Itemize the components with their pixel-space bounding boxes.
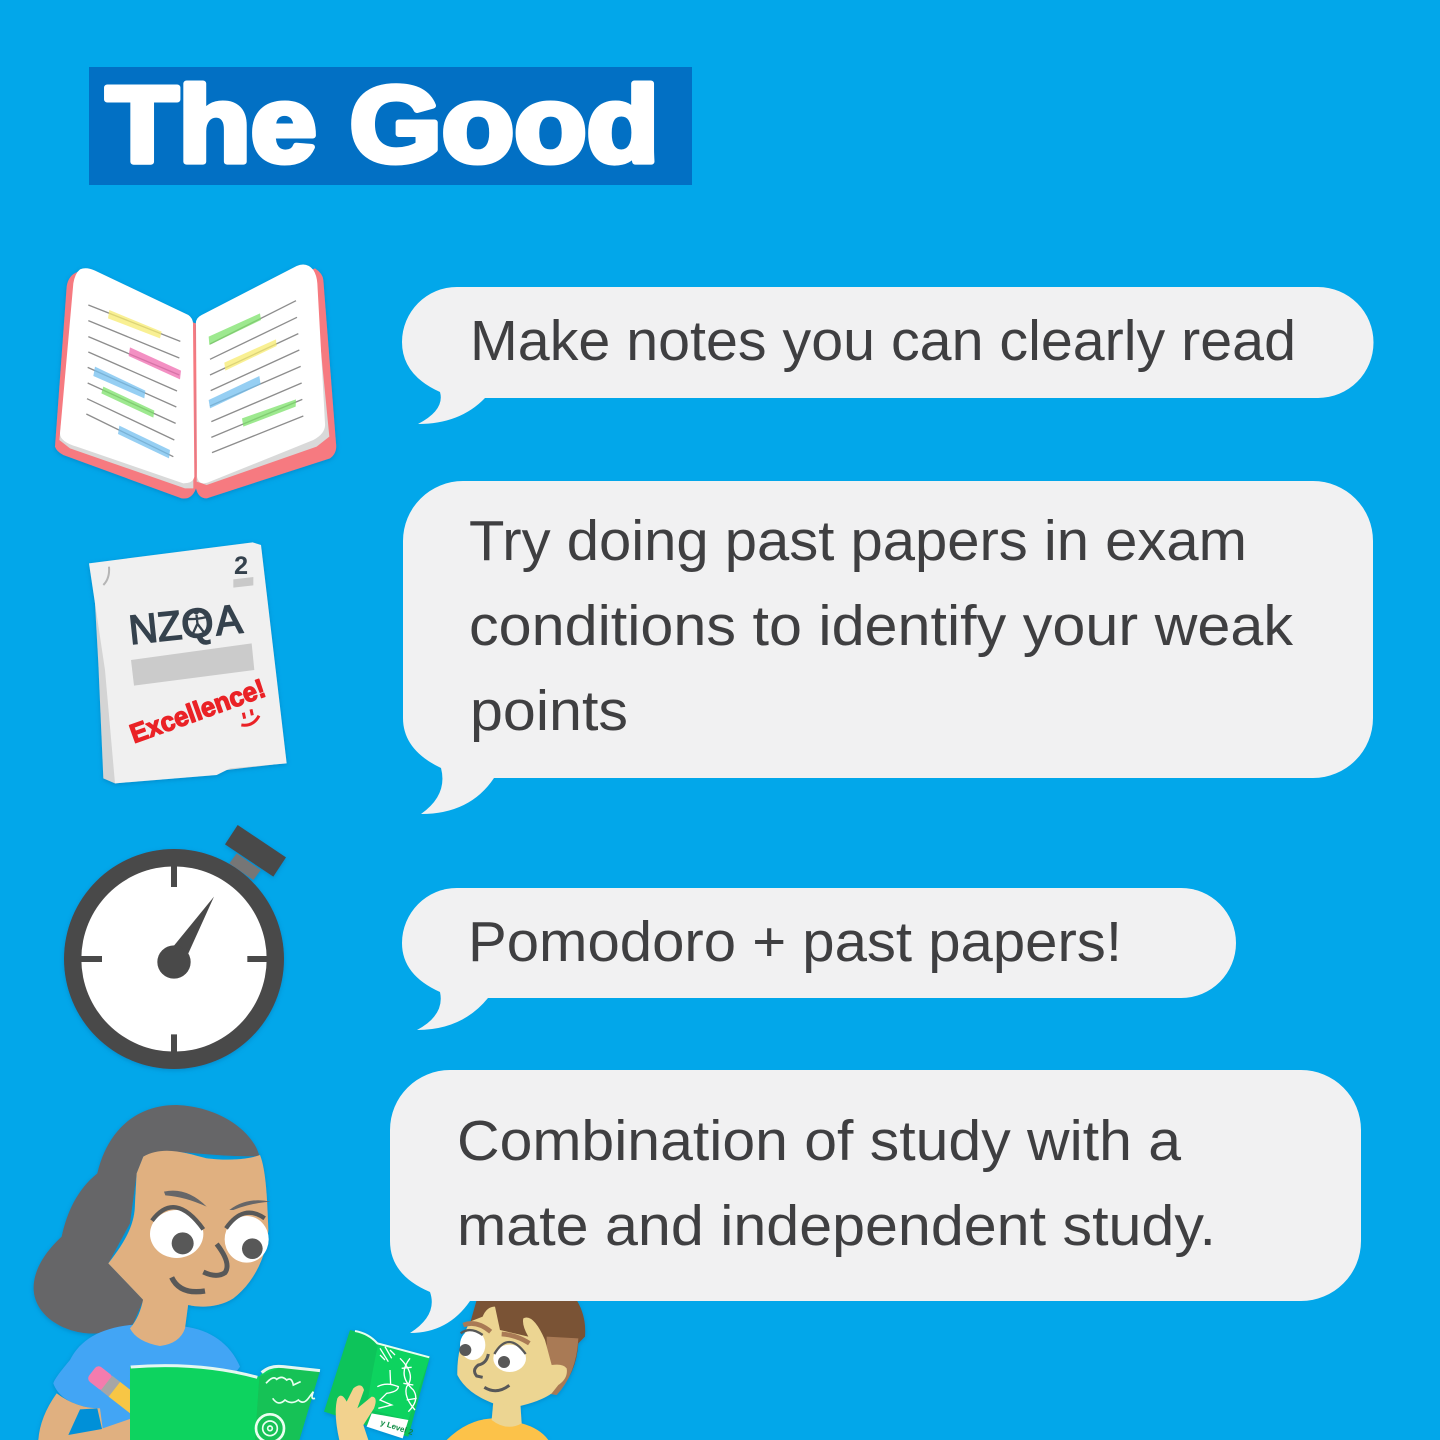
speech bubble: past papers: points — [470, 679, 628, 743]
NZQA logo — [127, 595, 245, 653]
speech bubble: past papers: Try doing past papers in exam — [469, 509, 1247, 573]
green book — [130, 1365, 320, 1440]
Excellence stamp: Excellence! — [126, 673, 269, 749]
brows — [164, 1191, 271, 1210]
hair — [34, 1105, 259, 1333]
speech bubble: pomodoro: Pomodoro + past papers! — [468, 910, 1122, 974]
character: girl reading — [34, 1105, 320, 1440]
speech bubble: past papers: conditions to identify your weak — [469, 594, 1294, 658]
eyes — [150, 1210, 203, 1258]
shirt — [53, 1325, 240, 1440]
icon: NZQA exam paper — [89, 542, 287, 783]
page number: 2 — [234, 552, 248, 580]
small green book: y Level 2 — [379, 1418, 415, 1437]
speech bubble: pomodoro — [402, 888, 1236, 1030]
speech bubble: clear notes: Make notes you can clearly read — [470, 309, 1296, 373]
speech bubble: clear notes — [402, 287, 1374, 424]
icon: stopwatch — [64, 825, 286, 1069]
arm — [38, 1393, 132, 1440]
NZQA logo: A — [213, 595, 245, 644]
small green book — [324, 1330, 430, 1440]
NZQA logo: Q — [179, 598, 216, 648]
speech bubble: study with a mate: Combination of study with a — [457, 1109, 1181, 1173]
title: The Good — [106, 64, 659, 184]
face — [108, 1151, 268, 1307]
icon: open book with highlighted notes — [55, 265, 336, 499]
neck — [130, 1298, 188, 1346]
NZQA logo: NZ — [127, 602, 184, 653]
speech bubble: past papers — [403, 481, 1373, 814]
speech bubble: study with a mate — [390, 1070, 1361, 1333]
pencil — [86, 1364, 144, 1415]
speech bubble: study with a mate: mate and independent study. — [457, 1194, 1216, 1258]
character: boy with study book — [324, 1300, 585, 1440]
nose and mouth — [203, 1244, 227, 1275]
